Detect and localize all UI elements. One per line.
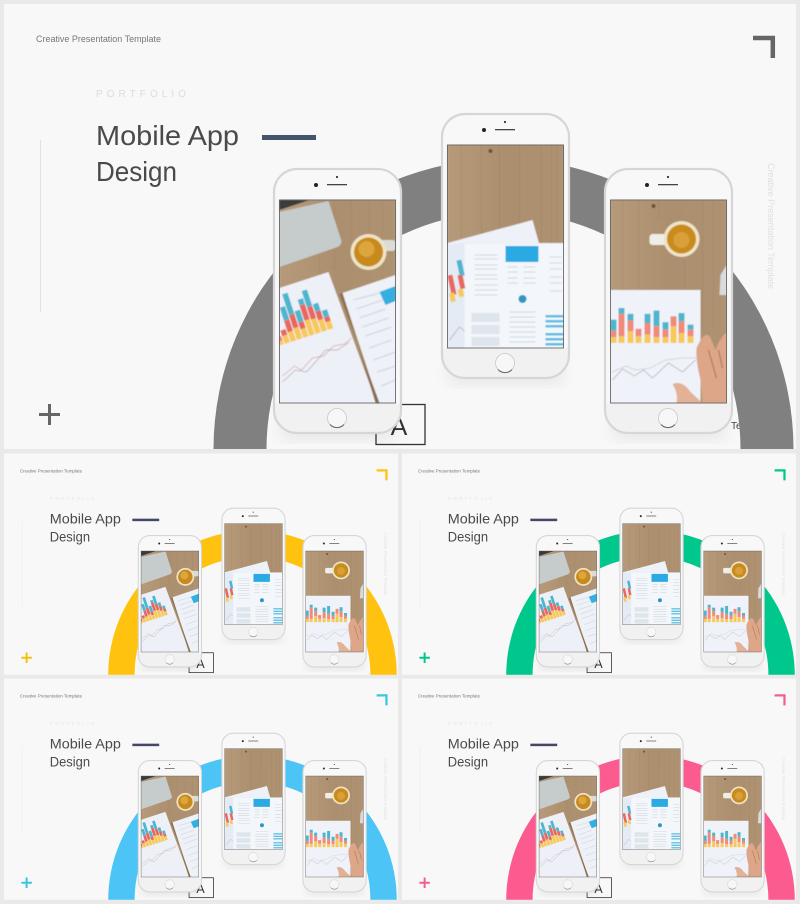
title: Mobile App: [448, 511, 519, 527]
vertical side text: Creative Presentation Template: [383, 758, 388, 821]
title: Design: [50, 754, 90, 770]
letter box: [587, 878, 611, 898]
panel: pink slide: [402, 678, 796, 900]
phone right: [303, 761, 366, 894]
letter box: [587, 653, 611, 673]
phone right: [701, 761, 764, 894]
arc: [108, 756, 397, 900]
title dash: [132, 519, 159, 521]
arc: [506, 531, 795, 675]
arc: [214, 159, 794, 449]
title: [50, 736, 121, 770]
title dash: [530, 519, 557, 521]
header label: Creative Presentation Template: [418, 468, 481, 473]
hidden label text: Te: [731, 421, 742, 432]
panel: blue slide: [4, 678, 398, 900]
title: Mobile App: [50, 736, 121, 752]
icon: plus: [21, 652, 32, 663]
letter box: [189, 878, 213, 898]
title: Mobile App: [50, 511, 121, 527]
corner bracket: [377, 470, 386, 480]
vertical side text: Creative Presentation Template: [781, 533, 786, 596]
title: Design: [50, 529, 90, 545]
side rule: [21, 746, 23, 832]
phone centre: [222, 733, 285, 867]
icon: plus: [39, 404, 60, 425]
phone centre: [442, 114, 569, 383]
icon: plus: [419, 652, 430, 663]
corner bracket: [775, 695, 784, 705]
eyebrow: PORTFOLIO: [50, 496, 95, 502]
title dash: [262, 135, 316, 140]
panel: yellow slide: [4, 453, 398, 675]
side rule: [420, 521, 421, 606]
panel: main grey slide: [4, 4, 796, 449]
icon: plus: [21, 877, 32, 888]
letter box: [376, 404, 425, 444]
title dash: [132, 744, 159, 746]
phone right: [605, 169, 732, 438]
letter box: A: [196, 882, 205, 896]
title: Mobile App: [96, 120, 239, 151]
arc: [506, 756, 795, 900]
phone right: [303, 536, 366, 669]
panel: green slide: [402, 453, 796, 675]
phone centre: [620, 733, 683, 867]
phone left: [133, 761, 201, 894]
phone centre: [620, 508, 683, 642]
title: [448, 736, 519, 770]
title: Mobile App: [448, 736, 519, 752]
title: Design: [448, 529, 488, 545]
vertical side text: Creative Presentation Template: [766, 163, 776, 289]
header label: Creative Presentation Template: [418, 693, 481, 698]
phone left: [531, 536, 599, 669]
header label: Creative Presentation Template: [36, 34, 161, 44]
letter box: A: [594, 657, 603, 671]
phone centre: [222, 508, 285, 642]
eyebrow: PORTFOLIO: [96, 89, 186, 100]
corner bracket: [377, 695, 386, 705]
title: [50, 514, 120, 544]
title dash: [530, 744, 557, 746]
phone right: [701, 536, 764, 669]
corner bracket: [753, 38, 773, 58]
icon: plus: [419, 877, 430, 888]
title: Design: [448, 754, 488, 770]
phone left: [531, 761, 599, 894]
eyebrow: PORTFOLIO: [448, 721, 493, 727]
letter box: A: [196, 657, 205, 671]
title: [448, 514, 518, 544]
eyebrow: PORTFOLIO: [50, 721, 95, 727]
side rule: [419, 746, 421, 832]
phone left: [133, 536, 201, 669]
letter box: A: [391, 413, 408, 441]
letter box: [189, 653, 213, 673]
side rule: [40, 140, 41, 312]
header label: Creative Presentation Template: [20, 693, 83, 698]
vertical side text: Creative Presentation Template: [383, 533, 388, 596]
arc: [108, 531, 397, 675]
header label: Creative Presentation Template: [20, 468, 83, 473]
eyebrow: PORTFOLIO: [448, 496, 493, 502]
title: Design: [96, 156, 177, 187]
side rule: [22, 521, 23, 606]
title: [96, 120, 239, 187]
phone left: [264, 169, 401, 438]
vertical side text: Creative Presentation Template: [781, 758, 786, 821]
letter box: A: [594, 882, 603, 896]
corner bracket: [775, 470, 784, 480]
